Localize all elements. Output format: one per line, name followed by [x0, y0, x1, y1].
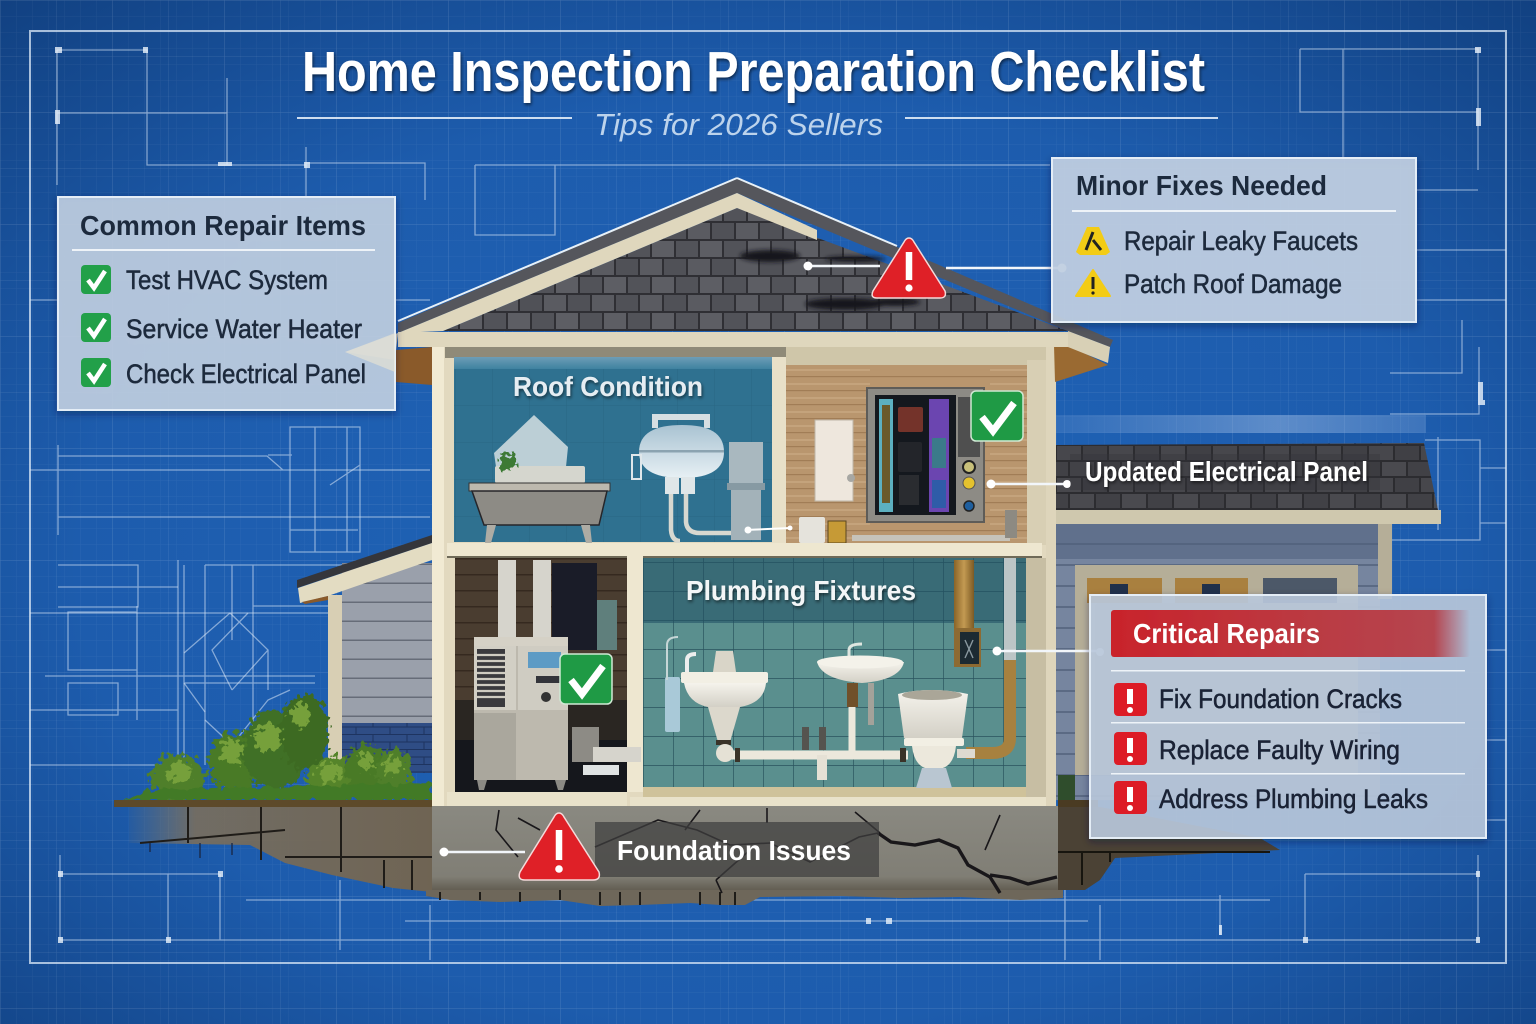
callout: foundation issues: Foundation Issues [617, 835, 851, 866]
connector: tub room [744, 526, 792, 534]
icon: bathtub with mirror [469, 415, 610, 543]
shelf items [799, 510, 1017, 543]
title: Home Inspection Preparation Checklist [302, 40, 1205, 104]
item: test hvac: Test HVAC System [126, 265, 328, 295]
icon: right wall sink [817, 644, 904, 725]
house body [432, 347, 1056, 806]
callout: roof damage [804, 238, 1066, 298]
foundation [426, 806, 1063, 906]
item: foundation: Fix Foundation Cracks [1159, 684, 1402, 714]
heading: Minor Fixes Needed [1076, 170, 1327, 201]
panel: common repair items [58, 197, 395, 410]
icon: warning roof [872, 238, 945, 298]
item: water heater: Service Water Heater [126, 314, 362, 344]
roof damage [740, 250, 920, 310]
icon: drain pipes [716, 707, 908, 780]
check badge: electrical [971, 391, 1023, 441]
heading: Common Repair Items [80, 210, 366, 241]
heading bar: Critical Repairs [1133, 618, 1320, 649]
room: roof condition [454, 357, 786, 544]
callout: updated electrical panel: Updated Electrical Panel [1085, 456, 1368, 487]
callout: foundation issues [440, 813, 879, 880]
room label: plumbing fixtures: Plumbing Fixtures [686, 575, 916, 606]
room: plumbing fixtures [447, 558, 1046, 806]
small boxes [572, 727, 641, 775]
rubble [426, 890, 1063, 906]
subtitle: Tips for 2026 Sellers [594, 107, 883, 142]
item: faucets: Repair Leaky Faucets [1124, 226, 1358, 256]
heading bar [1111, 610, 1470, 657]
icon: HVAC unit [474, 637, 568, 790]
icon: toilet [898, 690, 968, 788]
icon: wall cabinet [815, 420, 855, 501]
item: plumbing: Address Plumbing Leaks [1159, 784, 1428, 814]
room: HVAC [455, 556, 643, 792]
roof eave seen through panel [345, 333, 395, 372]
room: electrical [786, 347, 1046, 545]
check badge: HVAC [560, 654, 612, 704]
item: electrical: Check Electrical Panel [126, 359, 366, 389]
item: roof: Patch Roof Damage [1124, 269, 1342, 299]
callout: updated electrical panel [986, 454, 1380, 490]
callout: plumbing [992, 646, 1104, 656]
stone retaining wall [129, 807, 432, 892]
panel: minor fixes needed [1052, 158, 1416, 322]
left annex [297, 535, 432, 773]
main roof [345, 178, 1113, 385]
shrubs and lawn [114, 694, 432, 807]
icon: electrical panel [867, 388, 984, 522]
icon: brass and white supply pipes [954, 558, 1016, 758]
floor divider [447, 543, 1042, 558]
icon: water heater [632, 417, 765, 541]
room label: roof condition: Roof Condition [513, 371, 703, 402]
item: wiring: Replace Faulty Wiring [1159, 735, 1400, 765]
icon: left wall sink [665, 637, 768, 745]
icon: warning foundation [519, 813, 599, 880]
right annex [1056, 415, 1441, 890]
panel: critical repairs [1090, 595, 1486, 838]
